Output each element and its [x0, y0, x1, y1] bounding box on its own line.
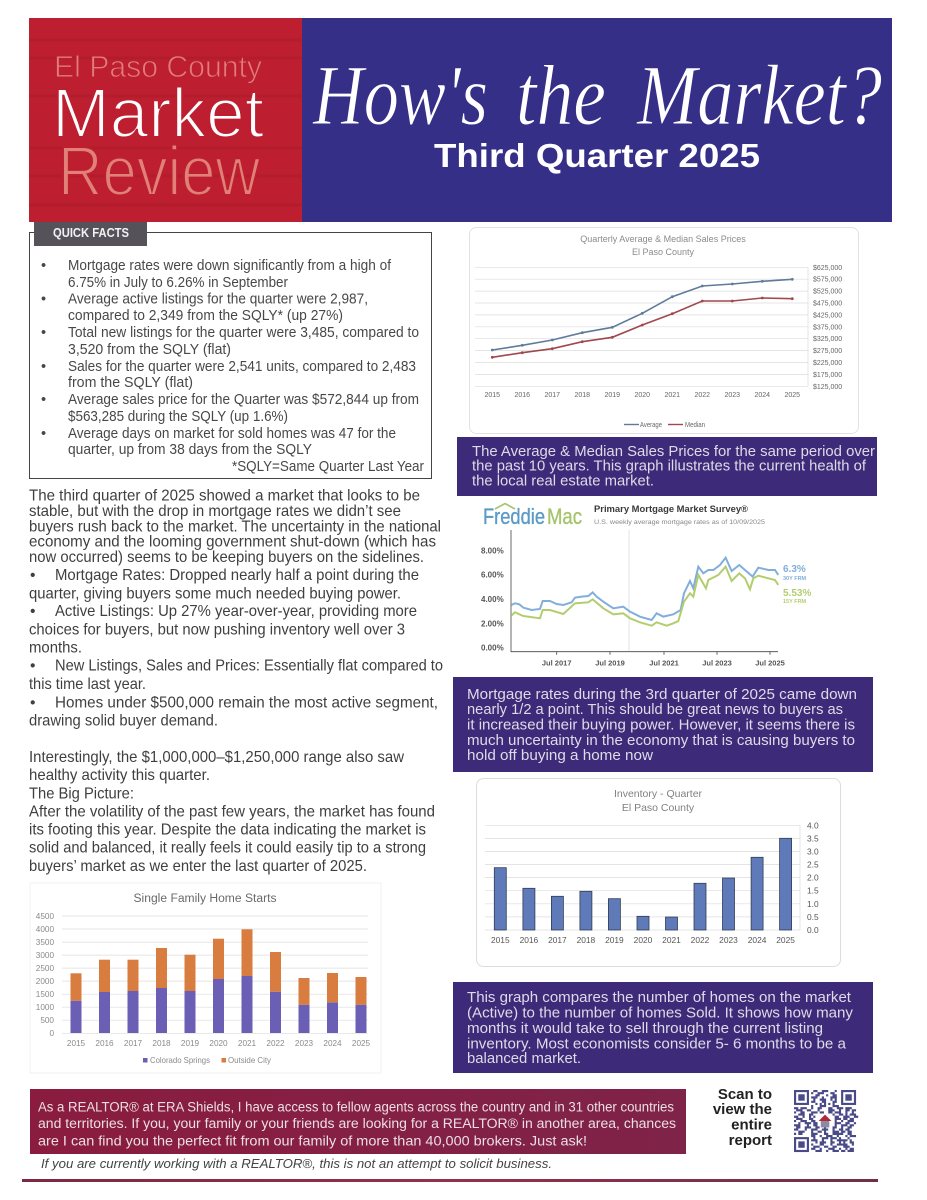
- headline: How's the Market?: Market?: [635, 47, 882, 143]
- x axis year labels: 2025: [776, 935, 795, 945]
- panel: quick facts: [30, 222, 432, 478]
- bullet list of quick facts: Average days on market for sold homes was 47 for the: [68, 426, 396, 442]
- body commentary text: quarter, giving buyers some much needed buying power.: [29, 585, 401, 602]
- footer: REALTOR message: are I can find you the perfect fit from our family of more than 40,000 brokers. Just ask!: [38, 1134, 587, 1149]
- bullet list of quick facts: compared to 2,349 from the SQLY* (up 27%): [68, 308, 343, 324]
- footer: REALTOR message: [30, 1089, 686, 1154]
- headline: How's the Market?: the: [516, 47, 606, 143]
- Freddie Mac logo: Freddie: [483, 504, 545, 529]
- line: 30 year rate: [511, 558, 778, 620]
- x axis labels: 2023: [295, 1039, 314, 1048]
- y axis labels: 1500: [36, 990, 54, 999]
- chart: Freddie Mac mortgage rates: [481, 504, 811, 668]
- caption: inventory: [453, 982, 873, 1073]
- y axis price labels: $525,000: [813, 289, 842, 296]
- body commentary text: The Big Picture:: [29, 785, 134, 802]
- y axis labels: 0.5: [807, 912, 819, 922]
- caption: mortgage rates: Mortgage rates during the 3rd quarter of 2025 came down: [467, 686, 857, 703]
- body commentary text: Mortgage Rates: Dropped nearly half a point during the: [55, 567, 419, 584]
- y axis price labels: $125,000: [813, 384, 842, 391]
- footer: REALTOR message: As a REALTOR® at ERA Shields, I have access to fellow agents across the country and in 31 other countries: [38, 1100, 674, 1115]
- chart: single family home starts: [30, 883, 381, 1073]
- body commentary text: now occurred) seems to be keeping buyers on the sidelines.: [29, 549, 424, 566]
- caption: mortgage rates: nearly 1/2 a point. This should be great news to buyers as: [467, 701, 843, 718]
- chart: inventory by quarter: [476, 778, 840, 966]
- y axis labels: 0: [49, 1029, 54, 1038]
- chart legend: [143, 1056, 272, 1065]
- quick facts tab: [34, 222, 147, 246]
- y axis price labels: $175,000: [813, 372, 842, 379]
- scan call to action: report: [729, 1132, 772, 1149]
- caption: mortgage rates: hold off buying a home now: [467, 747, 653, 764]
- icon: QR code: [794, 1091, 858, 1151]
- x axis year labels: 2019: [605, 392, 620, 399]
- x axis labels: 2019: [181, 1039, 200, 1048]
- x axis labels: 2018: [152, 1039, 171, 1048]
- x axis labels: 2025: [352, 1039, 371, 1048]
- y axis labels: 2000: [36, 977, 54, 986]
- quick facts tab: QUICK FACTS: [53, 226, 129, 240]
- x axis date labels: Jul 2021: [649, 659, 679, 668]
- bullet list of quick facts: •: [41, 392, 46, 408]
- body commentary text: months.: [29, 640, 82, 657]
- bullet list of quick facts: $563,285 during the SQLY (up 1.6%): [68, 409, 288, 425]
- header banner: [29, 18, 892, 222]
- x axis year labels: 2021: [665, 392, 680, 399]
- caption: inventory: This graph compares the number of homes on the market: [467, 989, 852, 1006]
- caption: sales prices: The Average & Median Sales Prices for the same period over: [472, 443, 875, 460]
- x axis year labels: 2017: [545, 392, 560, 399]
- x axis year labels: 2023: [719, 935, 738, 945]
- caption: inventory: months it would take to sell through the current listing: [467, 1020, 823, 1037]
- panel: red market review title block: [29, 18, 302, 222]
- y axis rate labels: 2.00%: [481, 620, 504, 629]
- y axis rate labels: [481, 547, 504, 653]
- bullet list of quick facts: •: [41, 258, 46, 274]
- scan call to action: [713, 1086, 772, 1149]
- x axis year labels: 2022: [695, 392, 710, 399]
- body commentary text: its footing this year. Despite the data indicating the market is: [29, 822, 426, 839]
- Freddie Mac logo: Mac: [547, 504, 582, 529]
- body commentary text: choices for buyers, but now pushing inventory well over 3: [29, 621, 405, 638]
- chart title: El Paso County: [622, 802, 695, 814]
- y axis labels: 1.0: [807, 899, 819, 909]
- x axis date labels: Jul 2017: [542, 659, 572, 668]
- y axis labels: [36, 912, 54, 1038]
- stacked bars: Colorado Springs: [70, 976, 366, 1033]
- caption: mortgage rates: much uncertainty in the economy that is causing buyers to: [467, 732, 855, 749]
- stacked bars: Outside City: [70, 929, 366, 1005]
- y axis labels: 0.0: [807, 925, 819, 935]
- body commentary text: drawing solid buyer demand.: [29, 713, 218, 730]
- chart legend: Average: [640, 422, 662, 429]
- body commentary text: buyers rush back to the market. The uncertainty in the national: [29, 518, 441, 535]
- body commentary text: this time last year.: [29, 676, 146, 693]
- body commentary text: [29, 488, 443, 875]
- y axis price labels: $275,000: [813, 348, 842, 355]
- bullet list of quick facts: Total new listings for the quarter were 3,485, compared to: [68, 325, 419, 341]
- y axis labels: 4000: [36, 925, 54, 934]
- x axis date labels: Jul 2019: [595, 659, 625, 668]
- bullet list of quick facts: 3,520 from the SQLY (flat): [68, 342, 231, 358]
- x axis year labels: 2024: [755, 392, 770, 399]
- bullet list of quick facts: •: [41, 292, 46, 308]
- chart title: Quarterly Average & Median Sales Prices: [580, 234, 746, 244]
- y axis price labels: $325,000: [813, 336, 842, 343]
- x axis year labels: 2024: [748, 935, 767, 945]
- rate callouts: 15Y FRM: [783, 599, 807, 605]
- y axis labels: 4.0: [807, 820, 819, 830]
- subheading: Third Quarter 2025: Third Quarter 2025: [434, 137, 760, 174]
- scan call to action: entire: [731, 1116, 772, 1134]
- title: Market: Market: [52, 74, 264, 152]
- body commentary text: Interestingly, the $1,000,000–$1,250,000 range also saw: [29, 749, 405, 766]
- bullet list of quick facts: •: [41, 359, 46, 375]
- chart title: [580, 234, 746, 257]
- x axis date labels: [542, 659, 785, 668]
- y axis labels: 3500: [36, 938, 54, 947]
- body commentary text: healthy activity this quarter.: [29, 767, 210, 784]
- y axis labels: [807, 820, 819, 935]
- caption: mortgage rates: [453, 677, 873, 772]
- body commentary text: •: [30, 567, 35, 584]
- y axis labels: 500: [40, 1016, 54, 1025]
- chart title: El Paso County: [632, 247, 695, 257]
- rate callouts: 6.3%: [783, 564, 806, 575]
- body commentary text: •: [30, 603, 35, 620]
- bullet list of quick facts: quarter, up from 38 days from the SQLY: [68, 442, 312, 458]
- survey subtitle: U.S. weekly average mortgage rates as of 10/09/2025: [594, 519, 765, 526]
- x axis year labels: 2022: [691, 935, 710, 945]
- y axis labels: 4500: [36, 912, 54, 921]
- scan call to action: Scan to: [718, 1086, 772, 1103]
- chart legend: [624, 422, 705, 429]
- x axis labels: 2016: [95, 1039, 114, 1048]
- y axis rate labels: 8.00%: [481, 547, 504, 556]
- x axis year labels: 2019: [605, 935, 624, 945]
- y axis price labels: $375,000: [813, 324, 842, 331]
- x axis year labels: 2025: [785, 392, 800, 399]
- body commentary text: •: [30, 694, 35, 711]
- y axis price labels: $625,000: [813, 265, 842, 272]
- chart title: Single Family Home Starts: [134, 893, 277, 905]
- y axis labels: 1000: [36, 1003, 54, 1012]
- x axis labels: 2021: [238, 1039, 257, 1048]
- bullet list of quick facts: Mortgage rates were down significantly from a high of: [68, 258, 392, 274]
- body commentary text: solid and balanced, it really feels it could easily tip to a strong: [29, 840, 426, 857]
- panel: blue headline block: [302, 18, 892, 222]
- SQLY footnote: *SQLY=Same Quarter Last Year: [232, 459, 424, 475]
- x axis labels: [67, 1039, 371, 1048]
- chart title: Inventory - Quarter: [614, 788, 703, 800]
- caption: inventory: inventory. Most economists consider 5- 6 months to be a: [467, 1036, 847, 1053]
- bullet list of quick facts: Sales for the quarter were 2,541 units, compared to 2,483: [68, 359, 416, 375]
- y axis labels: 3.5: [807, 833, 819, 843]
- caption: inventory: (Active) to the number of homes Sold. It shows how many: [467, 1005, 853, 1022]
- scan call to action: view the: [713, 1101, 772, 1118]
- bullet list of quick facts: 6.75% in July to 6.26% in September: [68, 275, 288, 291]
- x axis labels: 2022: [266, 1039, 285, 1048]
- body commentary text: New Listings, Sales and Prices: Essentially flat compared to: [55, 658, 443, 675]
- y axis rate labels: 4.00%: [481, 595, 504, 604]
- footer: REALTOR message: and territories. If you, your family or your friends are looking for a REALTOR® in another area, chances: [38, 1116, 676, 1131]
- body commentary text: Active Listings: Up 27% year-over-year, providing more: [55, 603, 417, 620]
- line: average price: [491, 278, 794, 351]
- disclaimer note: If you are currently working with a REALTOR®, this is not an attempt to solicit business.: [41, 1156, 552, 1171]
- survey title: Primary Mortgage Market Survey®: [594, 504, 748, 515]
- caption: sales prices: the local real estate market.: [472, 473, 654, 490]
- x axis year labels: 2018: [575, 392, 590, 399]
- y axis price labels: $425,000: [813, 312, 842, 319]
- bullet list of quick facts: •: [41, 426, 46, 442]
- x axis year labels: 2018: [577, 935, 596, 945]
- bullet list of quick facts: from the SQLY (flat): [68, 375, 193, 391]
- body commentary text: Homes under $500,000 remain the most active segment,: [55, 694, 438, 711]
- bullet list of quick facts: •: [41, 325, 46, 341]
- x axis labels: 2020: [209, 1039, 228, 1048]
- x axis labels: 2015: [67, 1039, 86, 1048]
- x axis date labels: Jul 2025: [755, 659, 785, 668]
- x axis year labels: 2021: [662, 935, 681, 945]
- y axis price labels: $575,000: [813, 277, 842, 284]
- caption: sales prices: [457, 437, 877, 496]
- x axis year labels: 2020: [634, 935, 653, 945]
- caption: sales prices: the past 10 years. This graph illustrates the current health of: [472, 458, 867, 475]
- y axis rate labels: 6.00%: [481, 571, 504, 580]
- line: median price: [491, 297, 794, 359]
- inventory bars: [494, 838, 792, 930]
- title: Review: Review: [58, 132, 260, 210]
- bullet list of quick facts: Average active listings for the quarter were 2,987,: [68, 292, 368, 308]
- body commentary text: After the volatility of the past few years, the market has found: [29, 804, 435, 821]
- rate callouts: [783, 564, 811, 605]
- body commentary text: The third quarter of 2025 showed a market that looks to be: [29, 488, 420, 505]
- bullet list of quick facts: [41, 258, 419, 458]
- body commentary text: •: [30, 658, 35, 675]
- body commentary text: economy and the looming government shut-down (which has: [29, 534, 436, 551]
- y axis rate labels: 0.00%: [481, 644, 504, 653]
- x axis year labels: 2015: [485, 392, 500, 399]
- body commentary text: stable, but with the drop in mortgage rates we didn’t see: [29, 503, 401, 520]
- y axis labels: 1.5: [807, 886, 819, 896]
- x axis date labels: Jul 2023: [702, 659, 732, 668]
- chart legend: Colorado Springs: [150, 1056, 210, 1065]
- y axis price labels: $475,000: [813, 300, 842, 308]
- title: El Paso County: El Paso County: [54, 49, 262, 84]
- y axis price labels: [813, 265, 842, 391]
- y axis labels: 3000: [36, 951, 54, 960]
- y axis labels: 2500: [36, 964, 54, 973]
- chart title: [614, 788, 703, 814]
- chart legend: Outside City: [228, 1056, 272, 1065]
- x axis labels: 2024: [323, 1039, 342, 1048]
- x axis year labels: 2016: [520, 935, 539, 945]
- headline: How's the Market?: [312, 47, 882, 143]
- x axis year labels: [485, 392, 800, 399]
- headline: How's the Market?: How's: [312, 47, 488, 143]
- x axis year labels: 2015: [491, 935, 510, 945]
- chart: quarterly average and median sales prices: [470, 228, 858, 434]
- y axis labels: 3.0: [807, 846, 819, 856]
- bottom rule: [22, 1179, 878, 1182]
- x axis year labels: 2016: [515, 392, 530, 399]
- y axis labels: 2.0: [807, 873, 819, 883]
- caption: inventory: balanced market.: [467, 1050, 581, 1067]
- x axis year labels: 2017: [548, 935, 567, 945]
- y axis price labels: $225,000: [813, 360, 842, 367]
- body commentary text: buyers’ market as we enter the last quarter of 2025.: [29, 858, 367, 875]
- y axis labels: 2.5: [807, 860, 819, 870]
- x axis year labels: 2020: [635, 392, 650, 399]
- rate callouts: 30Y FRM: [783, 576, 807, 582]
- caption: mortgage rates: it increased their buying power. However, it seems there is: [467, 716, 855, 733]
- rate callouts: 5.53%: [783, 588, 811, 599]
- line: 15 year rate: [511, 567, 778, 626]
- bullet list of quick facts: Average sales price for the Quarter was $572,844 up from: [68, 392, 419, 408]
- x axis year labels: [491, 935, 795, 945]
- x axis year labels: 2023: [725, 392, 740, 399]
- chart legend: Median: [685, 422, 705, 429]
- x axis labels: 2017: [124, 1039, 143, 1048]
